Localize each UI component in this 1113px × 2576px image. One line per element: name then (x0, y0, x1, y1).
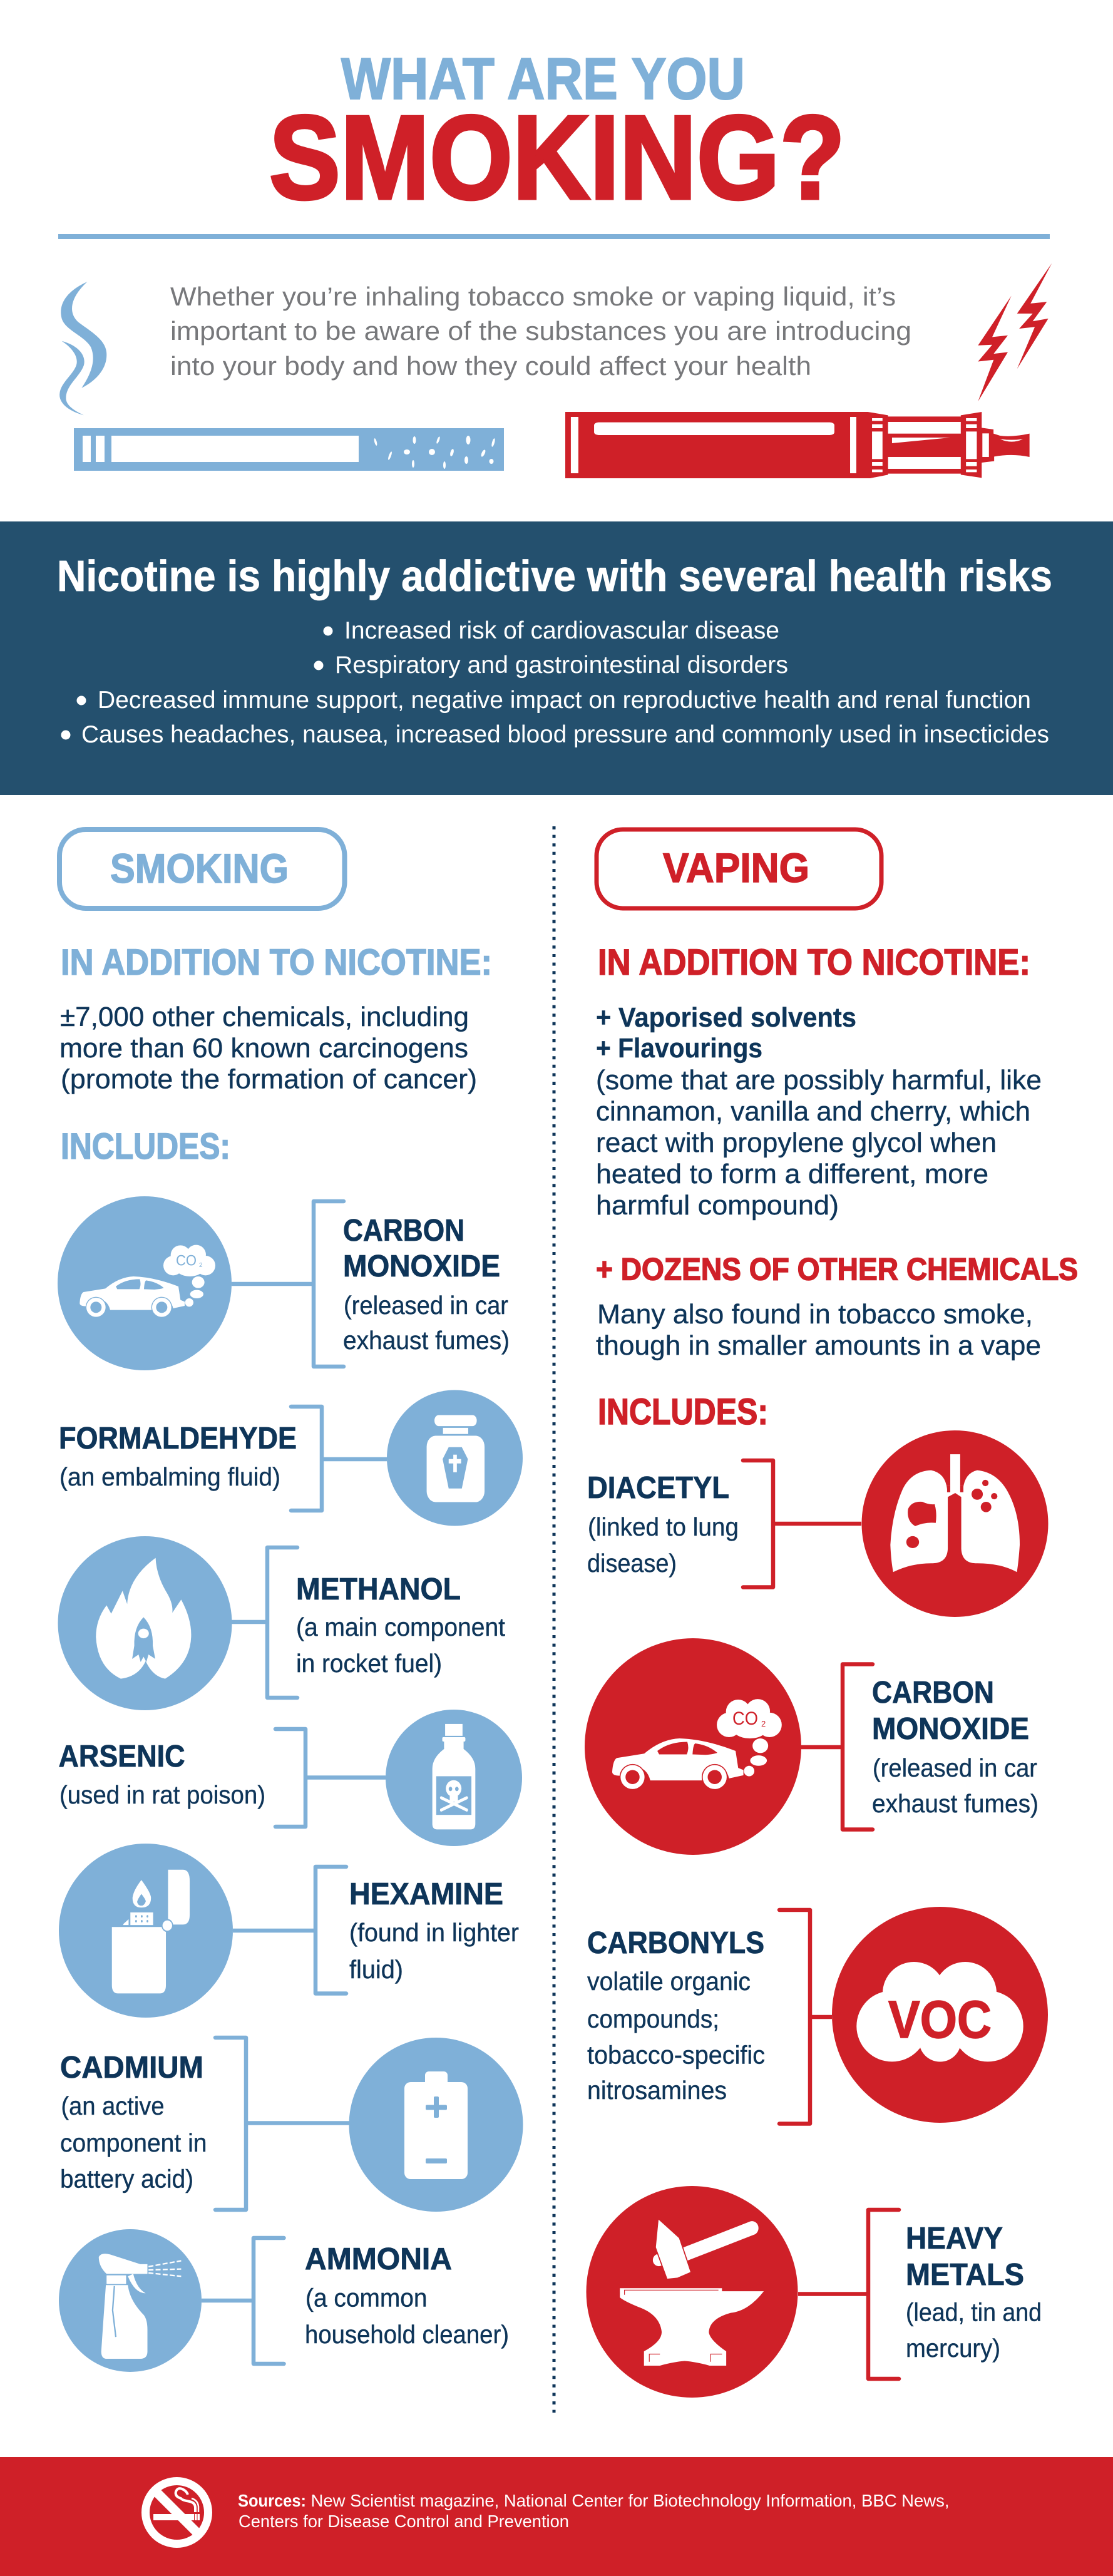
icon: smoke wisps (59, 282, 106, 415)
label (349, 1877, 519, 1984)
label (59, 1422, 297, 1491)
label: component in (60, 2128, 207, 2157)
label (305, 2242, 509, 2349)
label (296, 1573, 506, 1678)
item: heavy metals (586, 2186, 1042, 2398)
icon: VOC cloud: VOC (888, 1990, 992, 2049)
icon: car exhaust: 2 (199, 1262, 203, 1269)
label: (used in rat poison) (59, 1780, 265, 1809)
label (587, 1471, 739, 1578)
label: (linked to lung (588, 1512, 739, 1541)
icon: car exhaust: CO (732, 1708, 758, 1729)
label: exhaust fumes) (872, 1789, 1039, 1818)
label: (a main component (296, 1613, 506, 1641)
icon: battery (349, 2038, 523, 2212)
intro text: important to be aware of the substances you are introducing (170, 316, 911, 346)
label: METHANOL (296, 1573, 461, 1606)
icon: spray bottle (59, 2229, 202, 2372)
label: compounds; (587, 2004, 719, 2033)
label: MONOXIDE (343, 1250, 500, 1283)
label: METALS (906, 2258, 1024, 2292)
icon: hammer and anvil (586, 2186, 798, 2398)
label (906, 2222, 1042, 2363)
label: MONOXIDE (872, 1712, 1029, 1746)
icon: flame with rocket (58, 1536, 232, 1710)
dozens of other chemicals heading: + DOZENS OF OTHER CHEMICALS (596, 1252, 1078, 1287)
label: HEAVY (906, 2222, 1003, 2255)
item: cadmium (60, 2038, 523, 2212)
item: formaldehyde (59, 1390, 523, 1526)
label: (an active (61, 2091, 164, 2120)
label: CARBONYLS (587, 1926, 764, 1960)
icon: cigarette (74, 428, 504, 471)
vaping description: cinnamon, vanilla and cherry, which (596, 1096, 1030, 1127)
banner heading: Nicotine is highly addictive with several health risks (57, 552, 1052, 600)
label: volatile organic (587, 1967, 751, 1996)
sources text (238, 2491, 949, 2531)
label: (released in car (873, 1753, 1037, 1782)
smoking description (59, 1002, 477, 1094)
icon: car exhaust: CO (176, 1252, 197, 1270)
label: (an embalming fluid) (59, 1462, 280, 1491)
sources text: Centers for Disease Control and Prevention (238, 2512, 569, 2531)
icon: poison bottle (386, 1710, 522, 1846)
dozens description (596, 1299, 1041, 1361)
icon: lightning bolts (978, 264, 1052, 401)
label: CADMIUM (60, 2051, 203, 2085)
smoking label button: SMOKING (110, 845, 289, 891)
panel: vaping column (585, 829, 1078, 2398)
label: (lead, tin and (906, 2297, 1042, 2326)
label: household cleaner) (305, 2320, 509, 2349)
label (343, 1214, 510, 1355)
intro text: Whether you’re inhaling tobacco smoke or vaping liquid, it’s (170, 282, 896, 311)
label: AMMONIA (305, 2242, 452, 2276)
vaping label button (597, 829, 881, 908)
label: (found in lighter (349, 1918, 519, 1947)
vaping description: heated to form a different, more (596, 1159, 988, 1189)
label (587, 1926, 765, 2105)
smoking subheading: IN ADDITION TO NICOTINE: (61, 942, 492, 983)
label (59, 1740, 265, 1809)
vaping description: react with propylene glycol when (596, 1127, 997, 1158)
icon: car exhaust (585, 1638, 801, 1855)
label: CARBON (343, 1214, 464, 1248)
smoking includes heading: INCLUDES: (61, 1126, 230, 1167)
label: (released in car (344, 1291, 508, 1320)
item: carbon monoxide (smoking) (58, 1196, 510, 1370)
panel: footer (0, 2457, 1113, 2576)
banner bullet list (61, 617, 1049, 748)
item: ammonia (59, 2229, 509, 2372)
icon: vape pen (565, 412, 1030, 478)
label: FORMALDEHYDE (59, 1422, 297, 1455)
title: SMOKING? (269, 91, 845, 224)
sources text: New Scientist magazine, National Center for Biotechnology Information, BBC News, (310, 2491, 949, 2510)
dozens description: though in smaller amounts in a vape (596, 1330, 1041, 1361)
banner bullet list: Increased risk of cardiovascular disease (344, 617, 779, 644)
vaping label button: VAPING (663, 844, 809, 891)
label: nitrosamines (587, 2076, 727, 2105)
item: carbon monoxide (vaping) (585, 1638, 1039, 1855)
vaping description: harmful compound) (596, 1190, 839, 1221)
item: arsenic (59, 1710, 522, 1846)
panel: smoking column (58, 829, 523, 2372)
title: WHAT ARE YOU (341, 46, 745, 111)
intro text: into your body and how they could affect your health (170, 351, 811, 381)
icon: lungs (861, 1430, 1048, 1617)
sources text: Sources: (238, 2491, 306, 2510)
label: tobacco-specific (587, 2041, 765, 2070)
smoking label button (59, 829, 344, 908)
label (872, 1676, 1039, 1818)
icon: VOC cloud (832, 1907, 1048, 2123)
panel: nicotine banner (0, 521, 1113, 795)
smoking description: (promote the formation of cancer) (61, 1064, 477, 1094)
vaping description: (some that are possibly harmful, like (596, 1065, 1042, 1096)
icon: embalming bottle (387, 1390, 523, 1526)
icon: no smoking (145, 2481, 208, 2544)
label: exhaust fumes) (343, 1326, 510, 1355)
icon: lighter (59, 1844, 233, 2018)
icon: car exhaust (58, 1196, 232, 1370)
label: ARSENIC (59, 1740, 185, 1773)
banner bullet list: Respiratory and gastrointestinal disorders (335, 652, 788, 679)
title (269, 46, 845, 224)
item: hexamine (59, 1844, 519, 2018)
banner bullet list: Decreased immune support, negative impact on reproductive health and renal function (98, 687, 1031, 714)
dozens description: Many also found in tobacco smoke, (597, 1299, 1033, 1330)
icon: car exhaust: 2 (761, 1719, 766, 1728)
item: diacetyl (587, 1430, 1048, 1617)
item: carbonyls (587, 1907, 1048, 2123)
vaping description: + Vaporised solvents (596, 1002, 856, 1033)
vaping description (596, 1002, 1042, 1221)
vaping includes heading: INCLUDES: (598, 1392, 768, 1432)
label: HEXAMINE (349, 1877, 503, 1911)
label: in rocket fuel) (296, 1649, 442, 1678)
label: mercury) (906, 2334, 1000, 2363)
label: fluid) (349, 1955, 403, 1984)
intro text (170, 282, 911, 381)
smoking description: more than 60 known carcinogens (59, 1033, 468, 1064)
smoking description: ±7,000 other chemicals, including (60, 1002, 469, 1032)
banner bullet list: Causes headaches, nausea, increased blood pressure and commonly used in insecticides (81, 721, 1049, 748)
vaping subheading: IN ADDITION TO NICOTINE: (598, 942, 1030, 983)
label: DIACETYL (587, 1471, 729, 1505)
label (60, 2051, 207, 2194)
label: battery acid) (60, 2165, 193, 2194)
item: methanol (58, 1536, 506, 1710)
vaping description: + Flavourings (596, 1033, 762, 1064)
label: disease) (587, 1549, 677, 1578)
label: CARBON (872, 1676, 994, 1710)
label: (a common (305, 2284, 427, 2312)
